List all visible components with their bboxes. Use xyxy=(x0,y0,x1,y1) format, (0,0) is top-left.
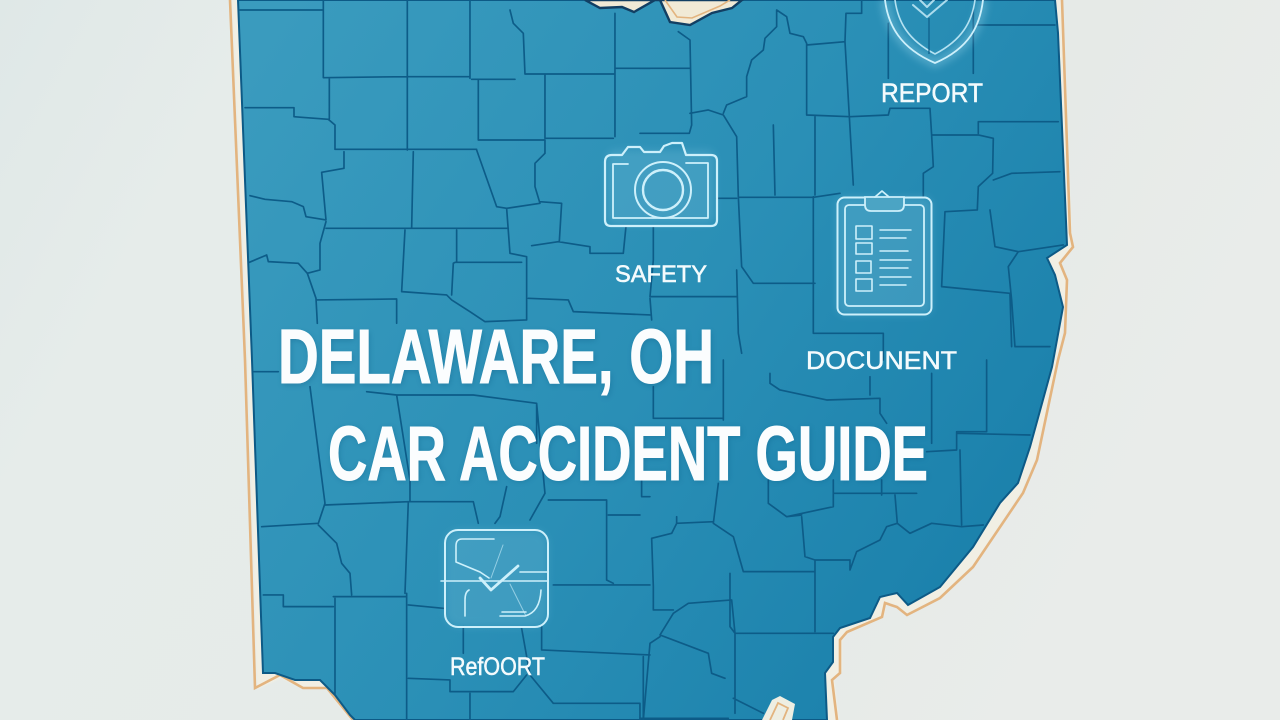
label: garbled report: RefOORT xyxy=(450,653,545,681)
title xyxy=(278,314,928,497)
map of Ohio counties xyxy=(230,0,1073,720)
label: REPORT: REPORT xyxy=(881,78,983,108)
title line 2: CAR ACCIDENT GUIDE xyxy=(328,411,928,497)
label: DOCUNENT: DOCUNENT xyxy=(806,347,957,375)
icon: map tile with checkmark xyxy=(441,530,548,627)
southern inlet xyxy=(762,696,795,720)
map border: cream band xyxy=(234,0,1070,720)
title shadow: DELAWARE, OH xyxy=(279,316,715,402)
county lines: north west xyxy=(240,0,650,323)
map body xyxy=(238,0,1067,720)
icon: camera xyxy=(605,143,717,226)
label: SAFETY: SAFETY xyxy=(615,261,707,288)
county lines: north east xyxy=(640,0,1063,360)
title shadow xyxy=(279,316,929,498)
lake shoreline highlight xyxy=(665,0,730,18)
map border: orange line xyxy=(230,0,1073,720)
title shadow: CAR ACCIDENT GUIDE xyxy=(329,412,929,498)
lake at the northern shore xyxy=(585,0,742,25)
title line 1: DELAWARE, OH xyxy=(278,314,714,400)
icon: shield with checkmark xyxy=(885,0,983,63)
county lines: south west xyxy=(253,372,650,720)
county lines: south east xyxy=(640,360,1030,720)
southern inlet shoreline xyxy=(770,703,788,720)
icon: clipboard checklist xyxy=(837,191,932,315)
